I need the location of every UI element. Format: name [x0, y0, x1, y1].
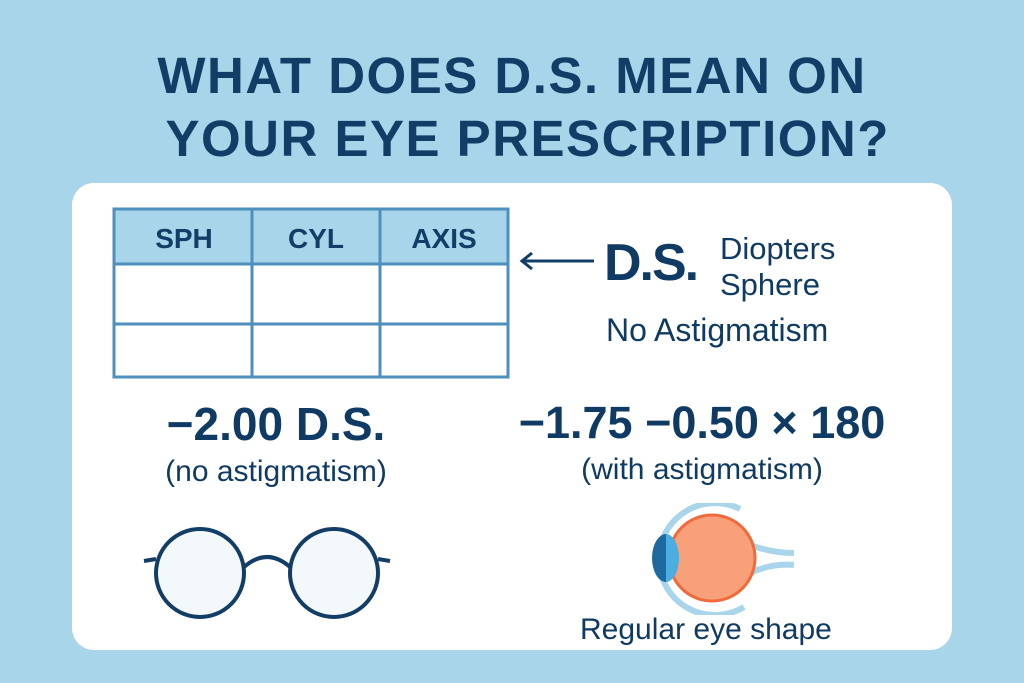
- example: astigmatism: [519, 397, 885, 486]
- example: D.S.: [165, 398, 387, 488]
- panel: main card: [72, 183, 952, 650]
- example: D.S.: (no astigmatism): [165, 455, 387, 488]
- icon: glasses: [144, 527, 390, 619]
- arrow: [520, 252, 594, 270]
- prescription table: SPH: [155, 223, 213, 254]
- definition text: [720, 231, 835, 302]
- caption: regular eye shape: Regular eye shape: [580, 613, 832, 646]
- prescription table: [112, 208, 510, 378]
- title: YOUR EYE PRESCRIPTION?: [165, 110, 890, 167]
- title: WHAT DOES D.S. MEAN ON: [157, 47, 867, 104]
- definition text: Diopters: [720, 231, 835, 266]
- D.S. label: D.S.: [604, 234, 697, 292]
- example: astigmatism: −1.75 −0.50 × 180: [519, 397, 885, 448]
- definition text: Sphere: [720, 267, 820, 302]
- prescription table: CYL: [288, 223, 344, 254]
- prescription table: AXIS: [411, 223, 477, 254]
- no astigmatism text: No Astigmatism: [606, 312, 828, 348]
- example: D.S.: −2.00 D.S.: [167, 398, 385, 450]
- title: [157, 47, 890, 167]
- icon: eye: [652, 503, 794, 615]
- example: astigmatism: (with astigmatism): [581, 453, 823, 486]
